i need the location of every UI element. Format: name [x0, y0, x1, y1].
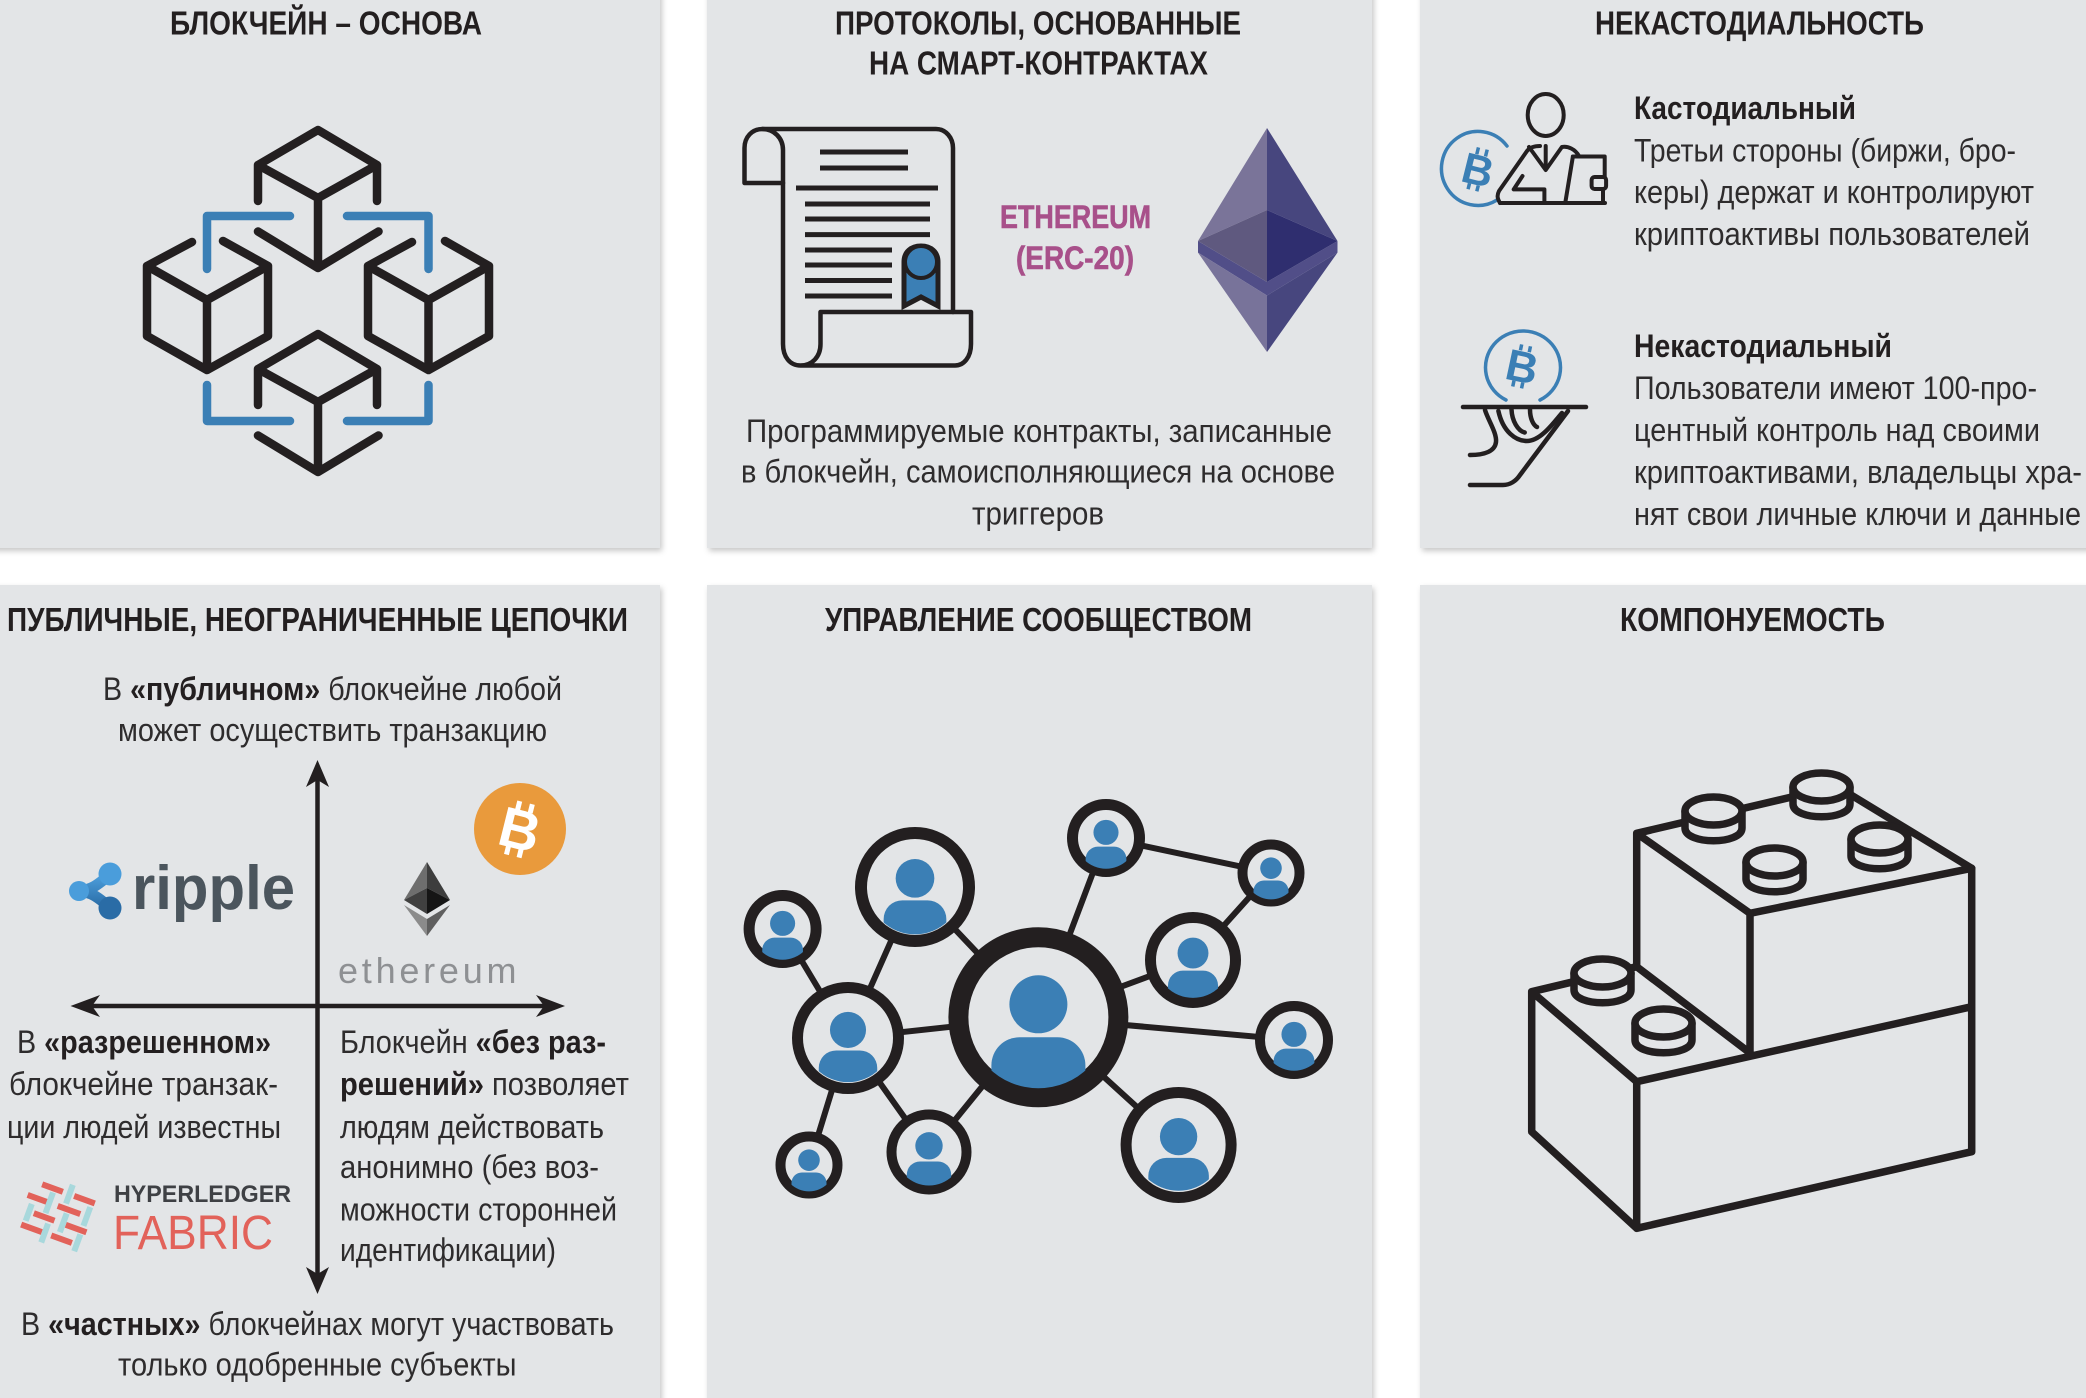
panel: blockchain foundation — [0, 0, 660, 548]
chart: quadrant axes — [70, 760, 565, 1294]
chart: people network — [749, 804, 1328, 1203]
text: non-custodial: центный контроль над своими — [1634, 412, 2040, 448]
text: custodial: криптоактивы пользователей — [1634, 216, 2030, 252]
text: custodial — [1634, 90, 2034, 252]
text: private blockchains — [21, 1306, 614, 1382]
text: permissionless blockchain: идентификации) — [340, 1232, 556, 1268]
logo: hyperledger fabric: HYPERLEDGER — [114, 1181, 291, 1208]
heading: composability: КОМПОНУЕМОСТЬ — [1620, 601, 1885, 638]
text: smart contract description: триггеров — [972, 496, 1104, 532]
text: permissioned blockchain: В «разрешенном» — [17, 1024, 271, 1060]
text: permissionless blockchain — [340, 1024, 629, 1268]
text: non-custodial — [1634, 328, 2082, 532]
heading: public permissionless chains: ПУБЛИЧНЫЕ, НЕОГРАНИЧЕННЫЕ ЦЕПОЧКИ — [7, 601, 628, 638]
panel: community governance — [707, 585, 1372, 1398]
logo: ethereum — [338, 862, 516, 991]
text: permissioned blockchain: ции людей известны — [7, 1109, 281, 1145]
text: non-custodial: Некастодиальный — [1634, 328, 1892, 364]
text: public blockchain — [103, 671, 562, 748]
text: custodial: Третьи стороны (биржи, бро- — [1634, 132, 2016, 168]
heading: smart contract protocols: НА СМАРТ-КОНТРАКТАХ — [869, 45, 1208, 82]
icon: hand holding bitcoin — [1463, 331, 1586, 485]
heading: smart contract protocols: ПРОТОКОЛЫ, ОСНОВАННЫЕ — [835, 4, 1241, 42]
icon: contract scroll with seal — [744, 129, 971, 366]
text: permissionless blockchain: решений» позволяет — [340, 1066, 629, 1102]
heading: non-custodial: НЕКАСТОДИАЛЬНОСТЬ — [1595, 4, 1924, 42]
label: Ethereum ERC-20 — [1000, 199, 1151, 276]
heading: blockchain foundation: БЛОКЧЕЙН – ОСНОВА — [170, 4, 482, 42]
text: permissionless blockchain: можности сторонней — [340, 1192, 617, 1228]
text: non-custodial: Пользователи имеют 100-про- — [1634, 370, 2037, 406]
logo: ethereum: ethereum — [338, 950, 516, 991]
icon: custodian with bitcoin: B — [1457, 144, 1499, 198]
heading: smart contract protocols — [835, 4, 1241, 82]
logo: bitcoin: B — [493, 794, 547, 865]
logo: ripple: ripple — [132, 854, 295, 923]
text: permissioned blockchain — [7, 1024, 281, 1145]
heading: community governance: УПРАВЛЕНИЕ СООБЩЕСТВОМ — [825, 601, 1252, 638]
icon: linked blockchain cubes — [147, 130, 489, 472]
panel: non-custodial — [1420, 0, 2086, 548]
icon: custodian with bitcoin — [1441, 94, 1606, 205]
text: permissionless blockchain: людям действовать — [340, 1109, 604, 1145]
text: private blockchains: В «частных» блокчейнах могут участвовать — [21, 1306, 614, 1342]
text: public blockchain: может осуществить транзакцию — [118, 712, 547, 748]
label: Ethereum ERC-20: (ERC-20) — [1016, 240, 1134, 276]
icon: Ethereum diamond — [1198, 128, 1338, 352]
logo: bitcoin — [474, 783, 566, 875]
icon: hand holding bitcoin: B — [1501, 340, 1543, 395]
text: smart contract description: Программируемые контракты, записанные — [746, 413, 1332, 449]
text: permissionless blockchain: анонимно (без воз- — [340, 1149, 599, 1185]
text: private blockchains: только одобренные субъекты — [118, 1346, 516, 1382]
text: public blockchain: В «публичном» блокчейне любой — [103, 671, 562, 707]
text: permissioned blockchain: блокчейне транзак- — [9, 1066, 278, 1102]
icon: stacked building blocks — [1532, 773, 1972, 1228]
text: custodial: Кастодиальный — [1634, 90, 1856, 126]
logo: hyperledger fabric: FABRIC — [113, 1207, 273, 1260]
text: permissionless blockchain: Блокчейн «без раз- — [340, 1024, 606, 1060]
logo: hyperledger fabric — [14, 1171, 291, 1260]
text: smart contract description — [741, 413, 1335, 532]
panel: composability — [1420, 585, 2086, 1398]
label: Ethereum ERC-20: ETHEREUM — [1000, 199, 1151, 235]
text: custodial: керы) держат и контролируют — [1634, 174, 2034, 210]
panel: public permissionless chains — [0, 585, 660, 1398]
text: smart contract description: в блокчейн, самоисполняющиеся на основе — [741, 454, 1335, 490]
panel: smart contract protocols — [707, 0, 1372, 548]
